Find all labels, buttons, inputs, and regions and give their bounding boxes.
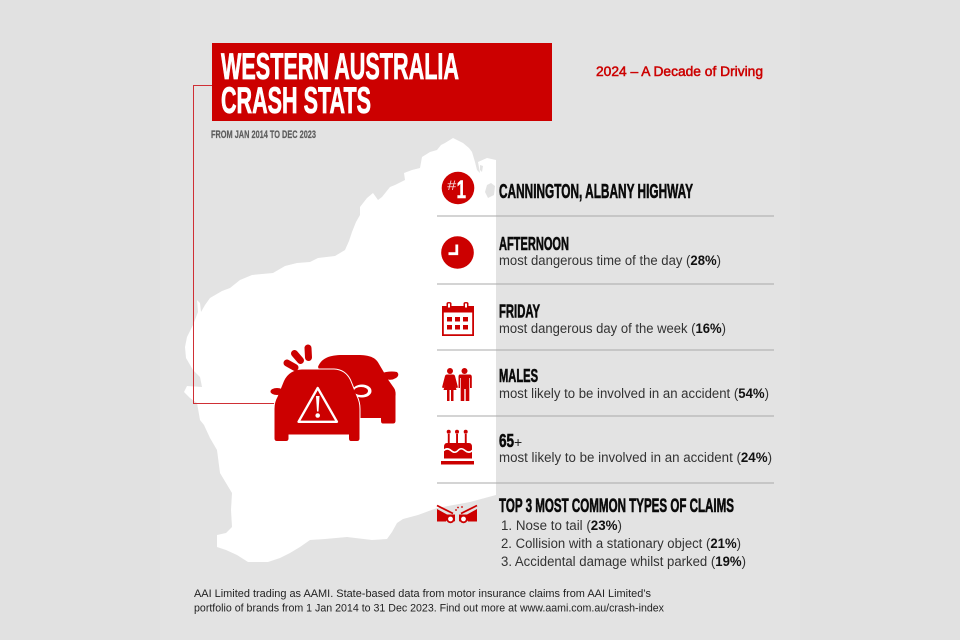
stat: top 3 claims: TOP 3 MOST COMMON TYPES OF CLAIMS — [499, 496, 734, 517]
stat: age 65+: + — [514, 434, 522, 450]
stat: males: MALES — [499, 365, 538, 386]
warning triangle — [298, 388, 337, 422]
icon: birthday cake — [441, 430, 474, 464]
stat: males: most likely to be involved in an accident (54%) — [499, 386, 769, 401]
title banner — [212, 43, 552, 121]
stat: afternoon: most dangerous time of the day (28%) — [499, 253, 721, 268]
stat: friday: most dangerous day of the week (16%) — [499, 321, 726, 336]
icon: calendar — [442, 302, 474, 336]
icon: female and male figures — [442, 368, 472, 401]
stat: top 3 claims: 3. Accidental damage whilst parked (19%) — [501, 554, 746, 569]
map of Western Australia — [184, 138, 496, 562]
icon: crashed cars with warning triangle — [270, 348, 398, 441]
front car body — [274, 370, 360, 441]
icon: number one badge: # — [447, 177, 456, 193]
stat: age 65+: 65 — [499, 430, 514, 451]
stat: friday: FRIDAY — [499, 300, 540, 322]
stat: males — [499, 365, 769, 401]
title banner: WESTERN AUSTRALIA — [221, 46, 459, 87]
icon: two cars colliding — [437, 506, 477, 522]
footnote: portfolio of brands from 1 Jan 2014 to 31 Dec 2023. Find out more at www.aami.com.au/crash-index — [194, 602, 664, 614]
stat: age 65+: most likely to be involved in an accident (24%) — [499, 450, 772, 465]
icon: clock — [441, 236, 474, 269]
report name: 2024 – A Decade of Driving — [596, 64, 763, 79]
connector line — [193, 85, 276, 404]
icon: number one badge: 1 — [456, 176, 466, 204]
front car right mirror — [354, 387, 368, 395]
stat: friday — [499, 300, 726, 336]
front car mirror halo — [352, 384, 372, 398]
stat: top 3 claims: 1. Nose to tail (23%) — [501, 518, 622, 533]
icon: number one badge — [442, 172, 474, 204]
stat: top 3 claims — [499, 496, 746, 569]
impact rays — [287, 348, 308, 368]
rear car — [318, 355, 398, 424]
stat: top 3 claims: 2. Collision with a stationary object (21%) — [501, 536, 741, 551]
front car left mirror — [270, 388, 284, 395]
title banner: CRASH STATS — [221, 80, 371, 121]
stat: age 65+ — [499, 430, 772, 465]
stat: afternoon — [499, 233, 721, 268]
footnote: AAI Limited trading as AAMI. State-based data from motor insurance claims from AAI Limited’s — [194, 588, 651, 600]
stat: top location: CANNINGTON, ALBANY HIGHWAY — [499, 180, 693, 203]
footnote — [194, 588, 664, 614]
stat: afternoon: AFTERNOON — [499, 233, 569, 254]
date range subtitle: FROM JAN 2014 TO DEC 2023 — [211, 129, 316, 141]
